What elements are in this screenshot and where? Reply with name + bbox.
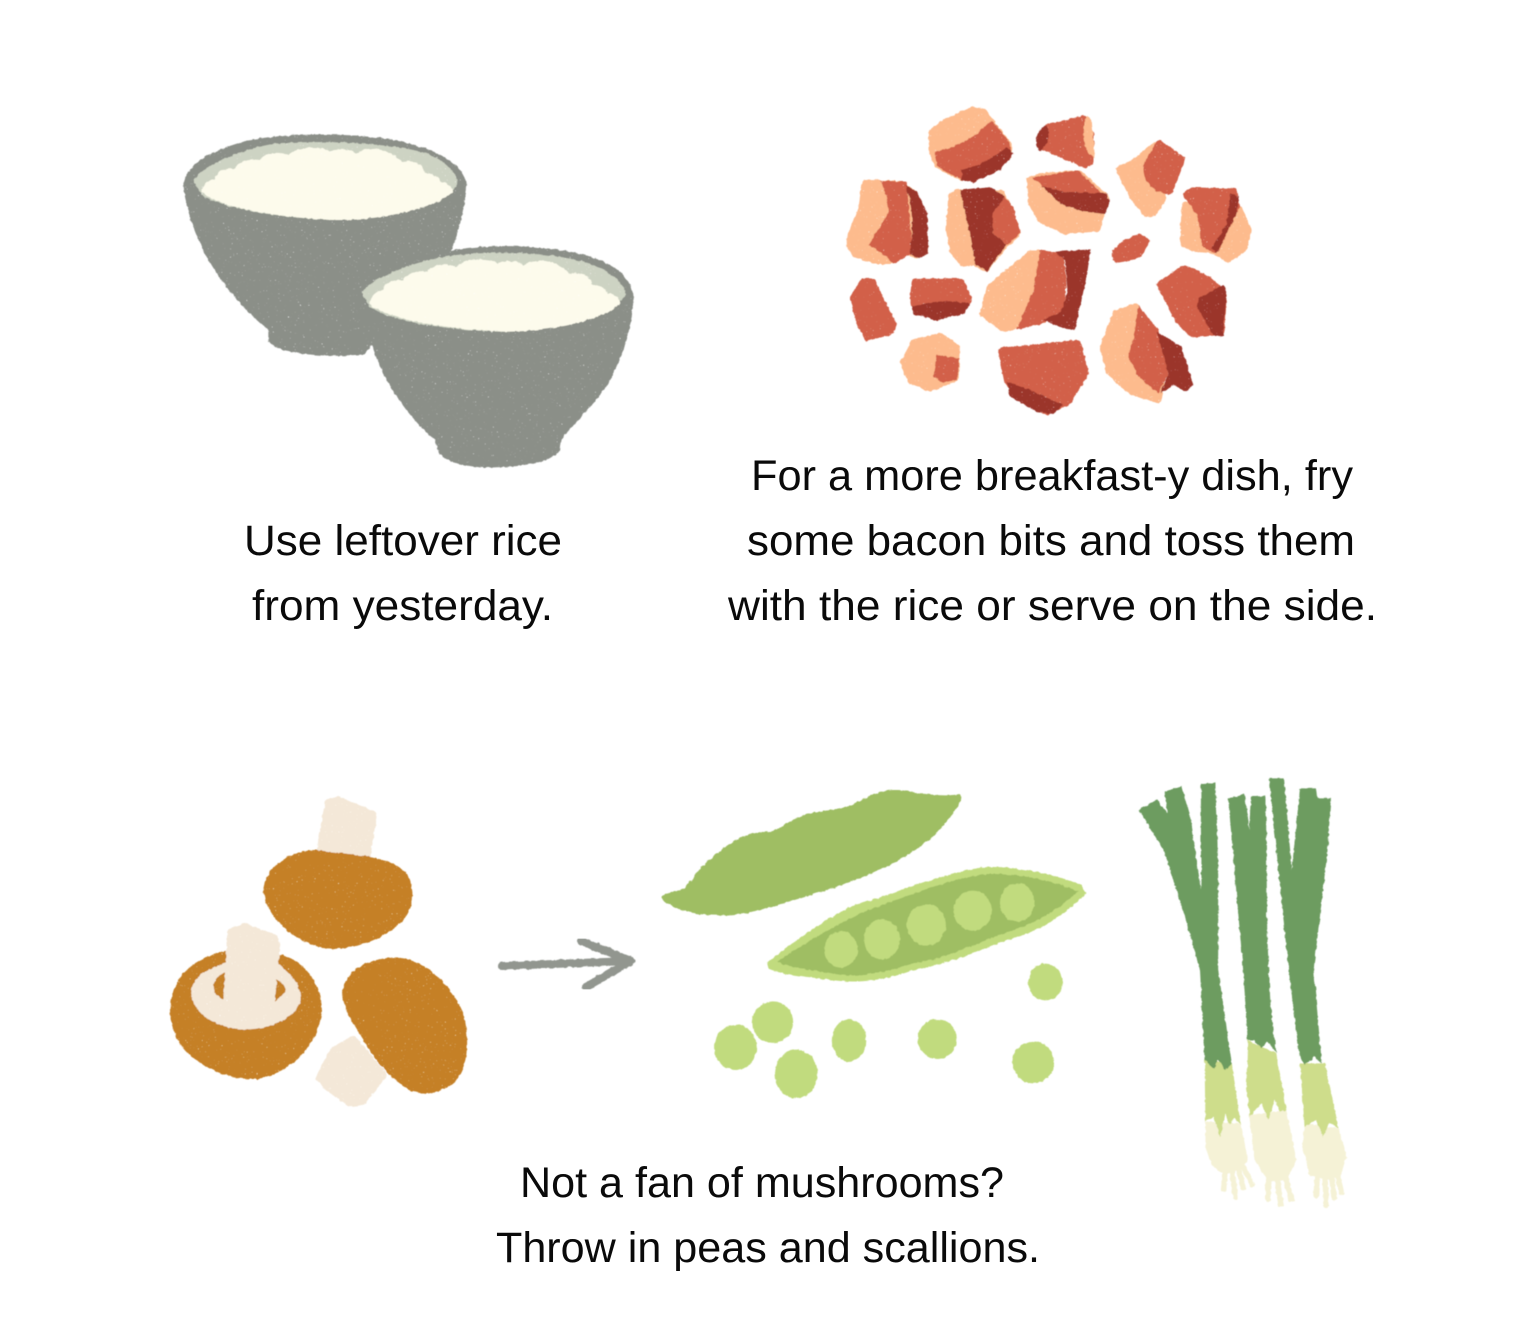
scallion 3 bbox=[1269, 778, 1346, 1206]
text: bacon tip: some bacon bits and toss them bbox=[747, 518, 1355, 565]
scallion 2 bbox=[1228, 794, 1296, 1205]
top mushroom bbox=[263, 800, 412, 949]
closed pod bbox=[661, 790, 961, 915]
arrow: swap mushrooms for peas and scallions bbox=[502, 941, 631, 987]
text: leftover rice tip: from yesterday. bbox=[252, 583, 553, 630]
text: mushroom alternative tip: Not a fan of mushrooms? bbox=[520, 1160, 1004, 1207]
back bowl bbox=[183, 135, 467, 356]
illustration: bacon bits bbox=[849, 110, 1248, 414]
front bowl bbox=[362, 246, 633, 467]
text: mushroom alternative tip: Throw in peas and scallions. bbox=[496, 1225, 1040, 1272]
text: bacon tip bbox=[727, 453, 1377, 630]
loose peas bbox=[714, 964, 1063, 1098]
text: bacon tip: For a more breakfast-y dish, fry bbox=[751, 453, 1354, 500]
right mushroom bbox=[320, 957, 467, 1103]
illustration: two bowls of rice bbox=[183, 135, 633, 467]
left mushroom bbox=[170, 927, 322, 1079]
illustration: scallions bbox=[1139, 778, 1346, 1206]
text: bacon tip: with the rice or serve on the side. bbox=[727, 583, 1377, 630]
illustration: peas bbox=[661, 790, 1086, 1098]
open pod bbox=[767, 867, 1086, 982]
scallion 1 bbox=[1139, 783, 1252, 1198]
text: leftover rice tip: Use leftover rice bbox=[244, 518, 562, 565]
illustration: mushrooms bbox=[170, 800, 467, 1103]
text: mushroom alternative tip bbox=[496, 1160, 1040, 1272]
text: leftover rice tip bbox=[244, 518, 562, 630]
